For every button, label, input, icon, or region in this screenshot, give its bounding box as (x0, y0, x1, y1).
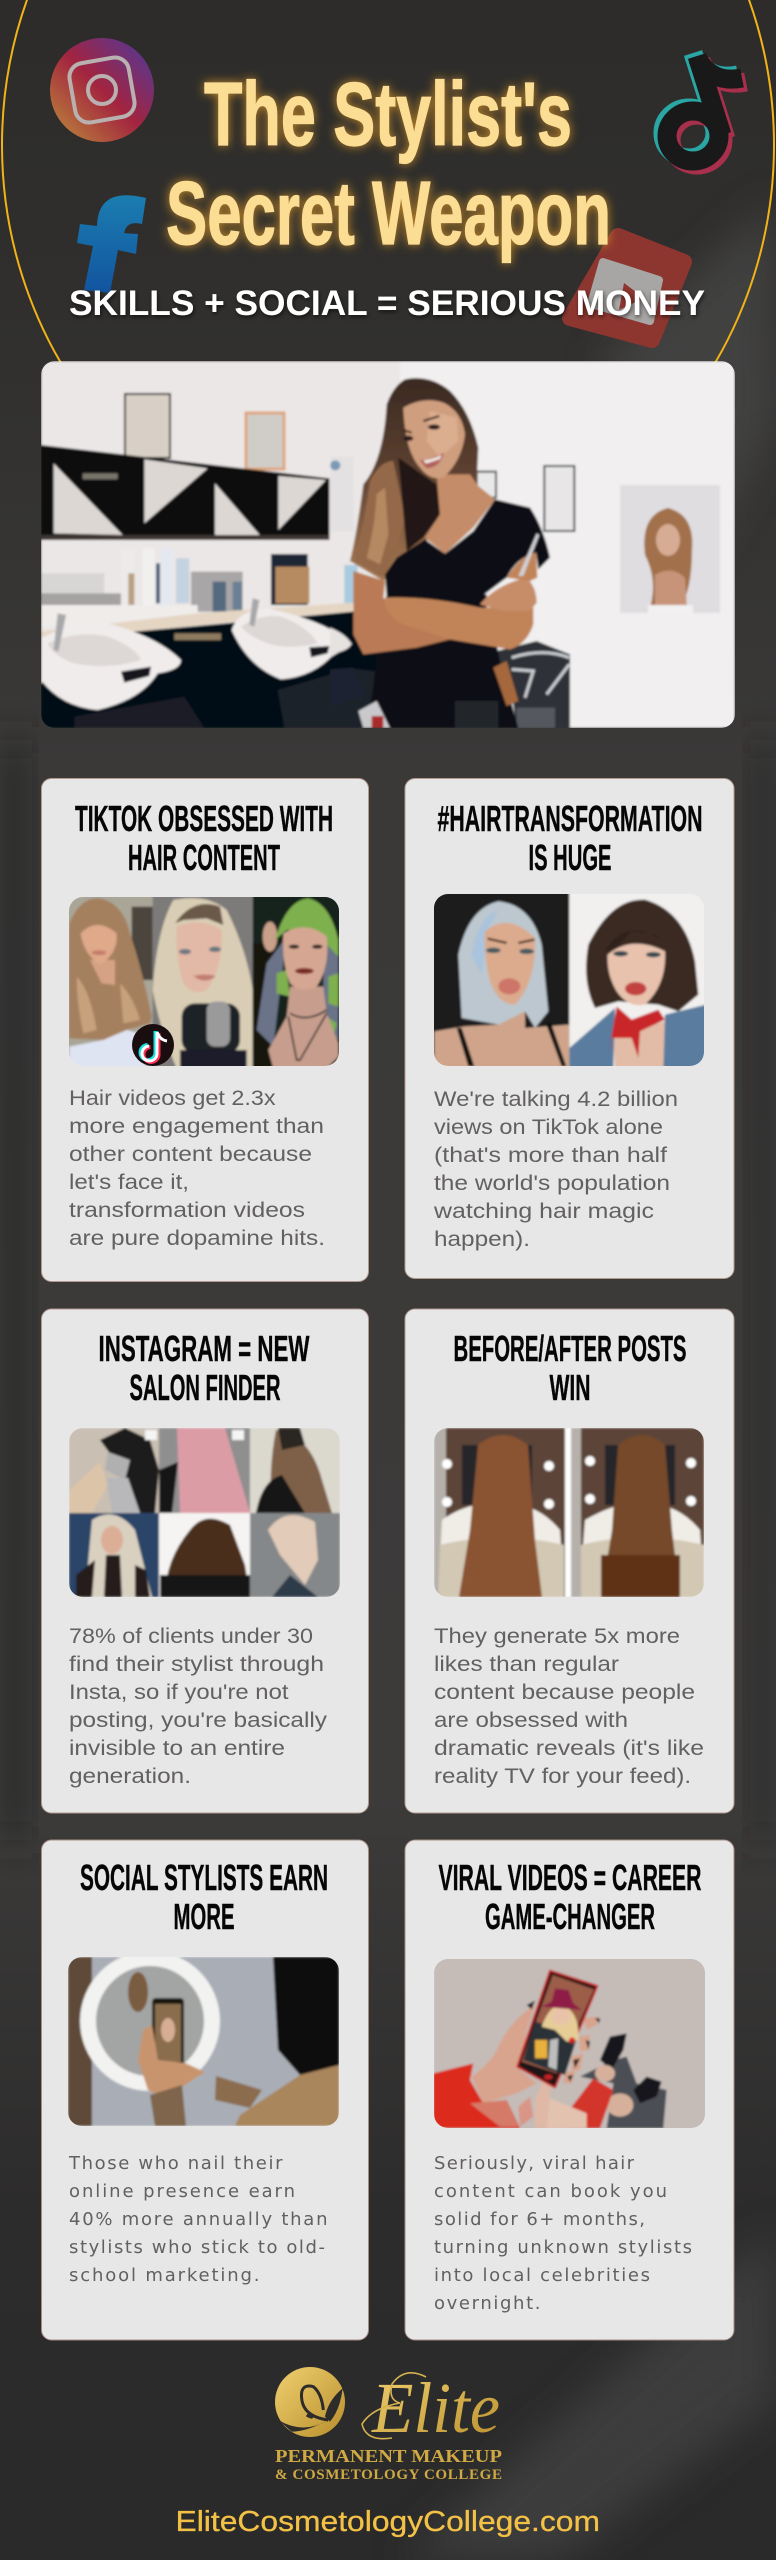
heading: MORE (174, 1896, 234, 1937)
icon: tiktok (663, 53, 746, 165)
body text: transformation videos (69, 1199, 305, 1222)
wordmark: Elite (371, 2368, 500, 2448)
icon: tiktok badge (132, 1024, 174, 1066)
body text: happen). (434, 1228, 530, 1251)
body text (69, 1625, 328, 1788)
body text (434, 2153, 692, 2314)
title: The Stylist's (204, 65, 572, 165)
stylist (330, 378, 574, 728)
body text: online presence earn (69, 2181, 295, 2202)
heading (75, 798, 333, 878)
college name (275, 2446, 502, 2483)
body text: more engagement than (69, 1115, 324, 1138)
body text: the world's population (434, 1172, 670, 1195)
body text: We're talking 4.2 billion (434, 1088, 678, 1111)
body text: content because people (434, 1681, 695, 1704)
heading (438, 798, 702, 878)
body text: turning unknown stylists (434, 2237, 692, 2258)
icon: instagram (50, 38, 154, 142)
body text: other content because (69, 1143, 312, 1166)
card: instagram (42, 1309, 368, 1813)
icon: butterfly badge (275, 2367, 345, 2437)
card: viral videos (405, 1840, 734, 2340)
body text: school marketing. (69, 2265, 260, 2286)
body text: Insta, so if you're not (69, 1681, 289, 1704)
heading: WIN (550, 1367, 590, 1408)
body text: invisible to an entire (69, 1737, 285, 1760)
body text: They generate 5x more (434, 1625, 680, 1648)
body text: likes than regular (434, 1653, 619, 1676)
photo: three hair looks (67, 895, 341, 1068)
body text: generation. (69, 1765, 191, 1788)
hero photo: stylist in salon (41, 361, 735, 728)
body text (433, 1088, 678, 1251)
heading (98, 1328, 310, 1408)
body text: overnight. (434, 2293, 540, 2314)
college name: PERMANENT MAKEUP (275, 2446, 502, 2466)
card: tiktok (42, 778, 368, 1282)
body text: Hair videos get 2.3x (69, 1087, 276, 1110)
body text: posting, you're basically (69, 1709, 328, 1732)
body text: content can book you (434, 2181, 667, 2202)
icon: facebook (77, 195, 146, 293)
body text: stylists who stick to old- (69, 2237, 325, 2258)
photo: ring light and phone (68, 1951, 339, 2126)
body text: 40% more annually than (69, 2209, 328, 2230)
website url: EliteCosmetologyCollege.com (176, 2506, 600, 2538)
photo: instagram grid (69, 1428, 340, 1597)
body text: Seriously, viral hair (434, 2153, 635, 2174)
body text: are obsessed with (434, 1709, 628, 1732)
icon: youtube (570, 236, 684, 340)
heading: IS HUGE (528, 837, 612, 878)
photo: hand holding phone (433, 1957, 710, 2130)
card: before and after (405, 1309, 734, 1813)
body text: views on TikTok alone (434, 1116, 663, 1139)
body text: dramatic reveals (it's like (434, 1737, 704, 1760)
heading: SOCIAL STYLISTS EARN (80, 1857, 328, 1898)
heading: HAIR CONTENT (128, 837, 280, 878)
body text: reality TV for your feed). (434, 1765, 691, 1788)
body text: solid for 6+ months, (434, 2209, 645, 2230)
card: hair transformation (405, 778, 734, 1278)
body text (69, 1087, 325, 1250)
heading (80, 1857, 328, 1937)
body text (68, 2153, 328, 2286)
heading: INSTAGRAM = NEW (98, 1328, 310, 1369)
salon counter and sinks (41, 445, 408, 728)
body text: into local celebrities (434, 2265, 650, 2286)
body text: watching hair magic (433, 1200, 654, 1223)
body text: let's face it, (69, 1171, 189, 1194)
heading (454, 1328, 686, 1408)
title (166, 65, 611, 264)
heading: TIKTOK OBSESSED WITH (75, 798, 333, 839)
body text: are pure dopamine hits. (69, 1227, 325, 1250)
body text: Those who nail their (68, 2153, 283, 2174)
heading: SALON FINDER (130, 1367, 281, 1408)
body text: 78% of clients under 30 (69, 1625, 313, 1648)
header (50, 38, 746, 340)
subtitle: SKILLS + SOCIAL = SERIOUS MONEY (69, 284, 705, 323)
photo: two hair looks (432, 891, 706, 1068)
body text (434, 1625, 704, 1788)
logo: Elite (275, 2367, 502, 2483)
college name: & COSMETOLOGY COLLEGE (275, 2467, 502, 2483)
heading (438, 1857, 702, 1937)
card: social stylists (42, 1840, 368, 2340)
body text: (that's more than half (434, 1144, 667, 1167)
photo: before and after hair (434, 1428, 704, 1597)
body text: find their stylist through (69, 1653, 324, 1676)
